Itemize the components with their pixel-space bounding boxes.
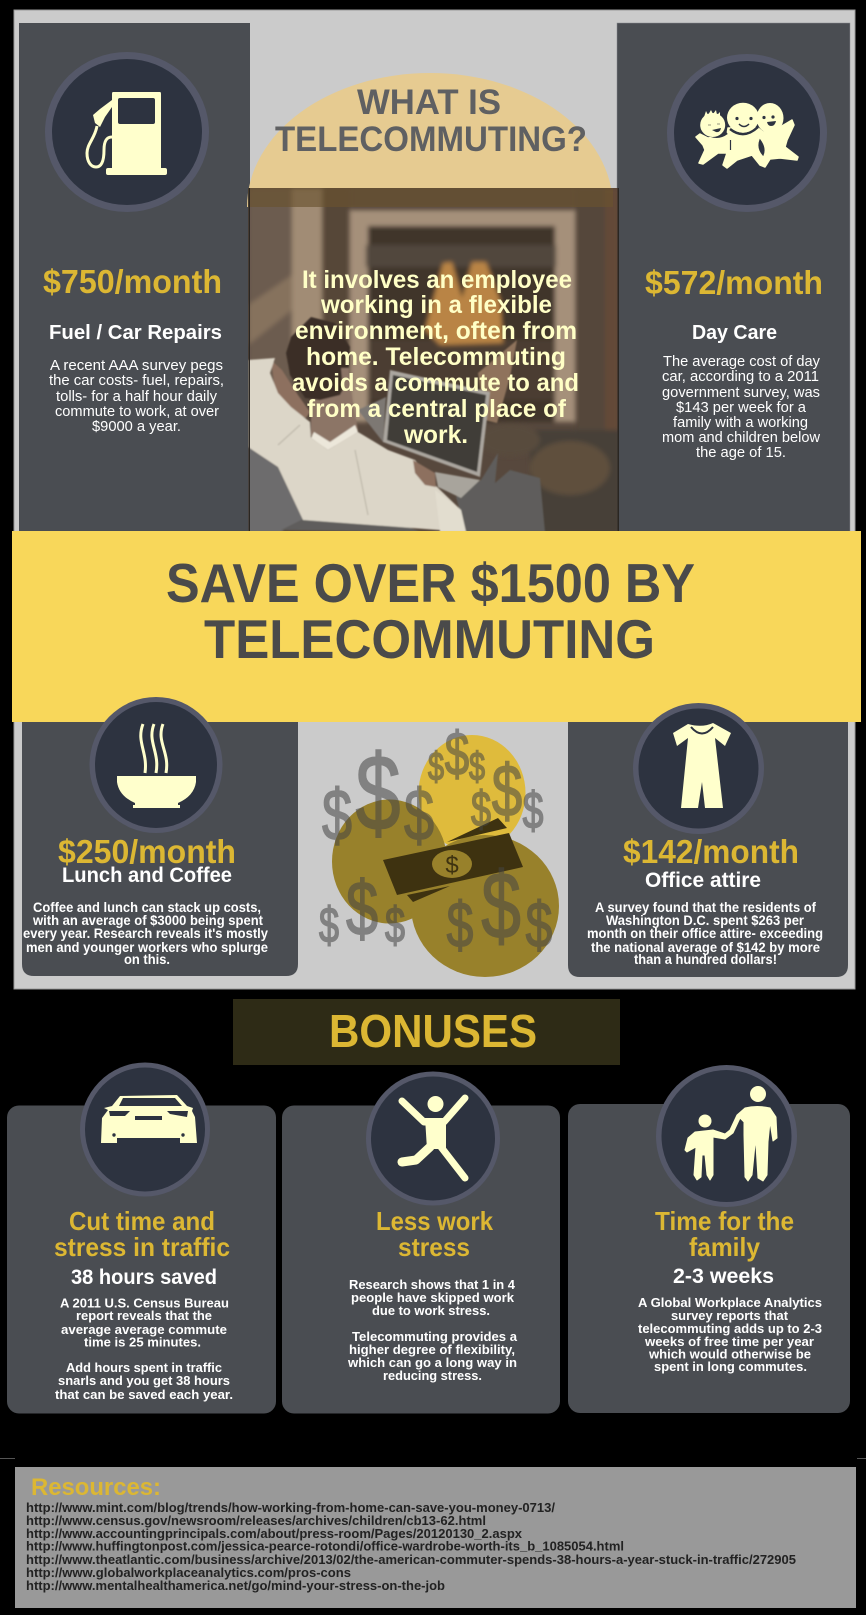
text: lunch description: on this. [124, 952, 170, 967]
heading: lunch: Lunch and Coffee [62, 864, 232, 887]
text: traffic description: average average commute [61, 1322, 227, 1337]
illustration: coins, dollar signs and banknote: $ [445, 721, 469, 789]
text: lunch description: with an average of $3000 being spent [32, 913, 263, 928]
illustration: coins, dollar signs and banknote: $ [385, 898, 405, 953]
icon: soup bowl [90, 697, 222, 833]
banner: save over 1500 [12, 531, 861, 722]
title: what is telecommuting [275, 83, 587, 159]
text: stress description: due to work stress. [372, 1303, 490, 1318]
text: lunch description: every year. Research reveals it's mostly [23, 926, 268, 941]
panel: cut time and stress: stress in traffic [54, 1232, 230, 1262]
text: fuel description: $9000 a year. [92, 418, 181, 435]
price: day care: $572/month [645, 264, 823, 301]
icon: car [80, 1062, 210, 1196]
icon: parent and child [656, 1065, 797, 1207]
text: telecommuting definition [292, 266, 579, 449]
text: stress description: which can go a long way in [347, 1355, 517, 1370]
text: telecommuting definition: It involves an employee [302, 266, 572, 294]
illustration: coins, dollar signs and banknote: $ [526, 889, 552, 961]
panel: lunch and coffee [22, 700, 298, 976]
text: resource links [26, 1501, 796, 1593]
text: telecommuting definition: environment, often from [295, 317, 577, 345]
text: lunch description: men and younger workers who splurge [26, 940, 268, 955]
text: traffic description: Add hours spent in traffic [66, 1360, 222, 1375]
panel: less work stress: stress [398, 1232, 470, 1262]
heading: stress: Less work [376, 1206, 493, 1236]
heading: resources: Resources: [31, 1474, 161, 1501]
panel: cut time and stress [7, 1062, 276, 1414]
text: resource links: http://www.theatlantic.com/business/archive/2013/02/the-american-commuter-spends-38-hours-a-year-stuck-in-traffic/272905 [26, 1553, 796, 1567]
illustration: coins, dollar signs and banknote: $ [404, 776, 434, 856]
text: family description: survey reports that [671, 1308, 789, 1323]
icon: three children [667, 54, 827, 212]
text: family description: spent in long commutes. [654, 1359, 807, 1374]
text: traffic description [55, 1296, 233, 1402]
heading: bonuses [233, 999, 620, 1065]
panel: less work stress [282, 1072, 560, 1414]
text: traffic description: A 2011 U.S. Census Bureau [60, 1296, 229, 1310]
text: stress description: higher degree of flexibility, [349, 1342, 515, 1357]
text: lunch description: Coffee and lunch can stack up costs, [33, 900, 261, 915]
illustration: coins, dollar signs and banknote: $ [523, 781, 543, 839]
text: day care description [662, 353, 820, 461]
panel: time for the family [568, 1065, 850, 1413]
text: stress description: reducing stress. [383, 1368, 482, 1383]
text: day care description: mom and children below [662, 429, 820, 446]
icon: jumping figure [366, 1072, 500, 1206]
price: lunch: $250/month [58, 833, 236, 870]
photo: man with laptop by fireplace [248, 188, 620, 534]
text: day care description: The average cost of day [663, 353, 820, 370]
text: stress description [347, 1277, 518, 1383]
heading: day care: Day Care [692, 322, 777, 344]
text: day care description: car, according to a 2011 [662, 368, 819, 385]
text: telecommuting definition: work. [403, 421, 468, 449]
text: traffic description: that can be saved each year. [55, 1387, 233, 1402]
price: attire: $142/month [623, 833, 799, 870]
title: what is telecommuting: TELECOMMUTING? [275, 120, 587, 159]
illustration: coins, dollar signs and banknote: $ [428, 744, 444, 789]
text: day care description: the age of 15. [696, 444, 786, 461]
stat: weeks: 2-3 weeks [673, 1265, 774, 1288]
heading: traffic: Cut time and [69, 1206, 215, 1236]
illustration: coins, dollar signs and banknote: $ [355, 734, 401, 854]
illustration: coins, dollar signs and banknote: $ [322, 776, 352, 856]
text: lunch description [23, 900, 268, 967]
panel: time for the family: family [689, 1232, 760, 1262]
icon: gas pump [45, 52, 209, 212]
illustration: coins, dollar signs and banknote: $ [481, 852, 521, 958]
heading backdrop: gold dome [247, 73, 612, 207]
icon: work clothes [633, 703, 764, 834]
illustration: coins, dollar signs and banknote: $ [346, 866, 378, 952]
panel: day care [617, 23, 850, 535]
text: traffic description: time is 25 minutes. [84, 1334, 201, 1350]
text: attire description: than a hundred dollars! [634, 952, 777, 967]
text: day care description: $143 per week for a [676, 399, 807, 416]
panel: office attire [568, 700, 848, 977]
text: family description: A Global Workplace Analytics [638, 1295, 822, 1310]
text: attire description: Washington D.C. spent $263 per [606, 913, 805, 928]
panel: light gray frame [14, 10, 855, 989]
text: attire description: the national average of $142 by more [591, 940, 820, 955]
text: day care description: family with a working [673, 414, 808, 431]
text: family description [638, 1295, 822, 1374]
text: day care description: government survey, was [662, 384, 820, 401]
text: stress description: people have skipped work [351, 1290, 515, 1305]
text: family description: which would otherwise be [648, 1346, 811, 1362]
text: telecommuting definition: from a central place of [307, 395, 567, 423]
text: traffic description: report reveals that the [76, 1308, 212, 1323]
text: resource links: http://www.huffingtonpost.com/jessica-pearce-rotondi/office-wardrobe-worth-its_b_1085054.html [26, 1540, 624, 1554]
panel: resources [15, 1467, 856, 1608]
text: traffic description: snarls and you get 38 hours [58, 1373, 230, 1388]
text: fuel description: A recent AAA survey pegs [50, 357, 223, 374]
text: stress description: Telecommuting provides a [352, 1329, 518, 1344]
text: resource links: http://www.mentalhealthamerica.net/go/mind-your-stress-on-the-job [26, 1579, 445, 1593]
text: resource links: http://www.mint.com/blog/trends/how-working-from-home-can-save-you-money-0713/ [26, 1501, 556, 1515]
text: fuel description: the car costs- fuel, repairs, [49, 372, 224, 389]
heading: bonuses: BONUSES [329, 1005, 537, 1057]
text: telecommuting definition: home. Telecommuting [306, 343, 566, 371]
text: family description: telecommuting adds up to 2-3 [638, 1321, 822, 1336]
text: fuel description: tolls- for a half hour daily [56, 388, 217, 405]
text: stress description: Research shows that 1 in 4 [349, 1277, 516, 1292]
illustration: coins, dollar signs and banknote [319, 721, 559, 977]
banner: save over 1500: SAVE OVER $1500 BY [166, 552, 695, 614]
price: fuel: $750/month [43, 263, 222, 300]
illustration: coins, dollar signs and banknote: $ [469, 744, 485, 789]
illustration: coins, dollar signs and banknote: $ [492, 750, 522, 832]
text: resource links: http://www.accountingprincipals.com/about/press-room/Pages/20120130_2.aspx [26, 1527, 522, 1541]
text: telecommuting definition: working in a flexible [320, 291, 552, 319]
illustration: coins, dollar signs and banknote: $ [471, 782, 491, 837]
panel: fuel and car repairs [19, 23, 250, 535]
text: attire description: A survey found that the residents of [595, 900, 816, 915]
illustration: coins, dollar signs and banknote: $ [319, 898, 339, 953]
text: attire description [587, 900, 823, 967]
heading: attire: Office attire [645, 869, 761, 892]
illustration: coins, dollar signs and banknote: $ [445, 852, 459, 879]
text: resource links: http://www.census.gov/newsroom/releases/archives/children/cb13-62.html [26, 1514, 486, 1528]
illustration: coins, dollar signs and banknote: $ [447, 889, 473, 961]
text: fuel description: commute to work, at over [55, 403, 219, 420]
title: what is telecommuting: WHAT IS [357, 83, 501, 122]
banner: save over 1500: TELECOMMUTING [204, 608, 655, 670]
stat: hours saved: 38 hours saved [71, 1266, 217, 1289]
text: telecommuting definition: avoids a commute to and [292, 369, 579, 397]
text: resource links: http://www.globalworkplaceanalytics.com/pros-cons [26, 1566, 351, 1580]
heading: family: Time for the [655, 1206, 794, 1236]
heading: fuel: Fuel / Car Repairs [49, 322, 222, 344]
text: fuel description [49, 357, 224, 435]
text: attire description: month on their office attire- exceeding [587, 926, 823, 941]
text: family description: weeks of free time per year [644, 1334, 814, 1349]
